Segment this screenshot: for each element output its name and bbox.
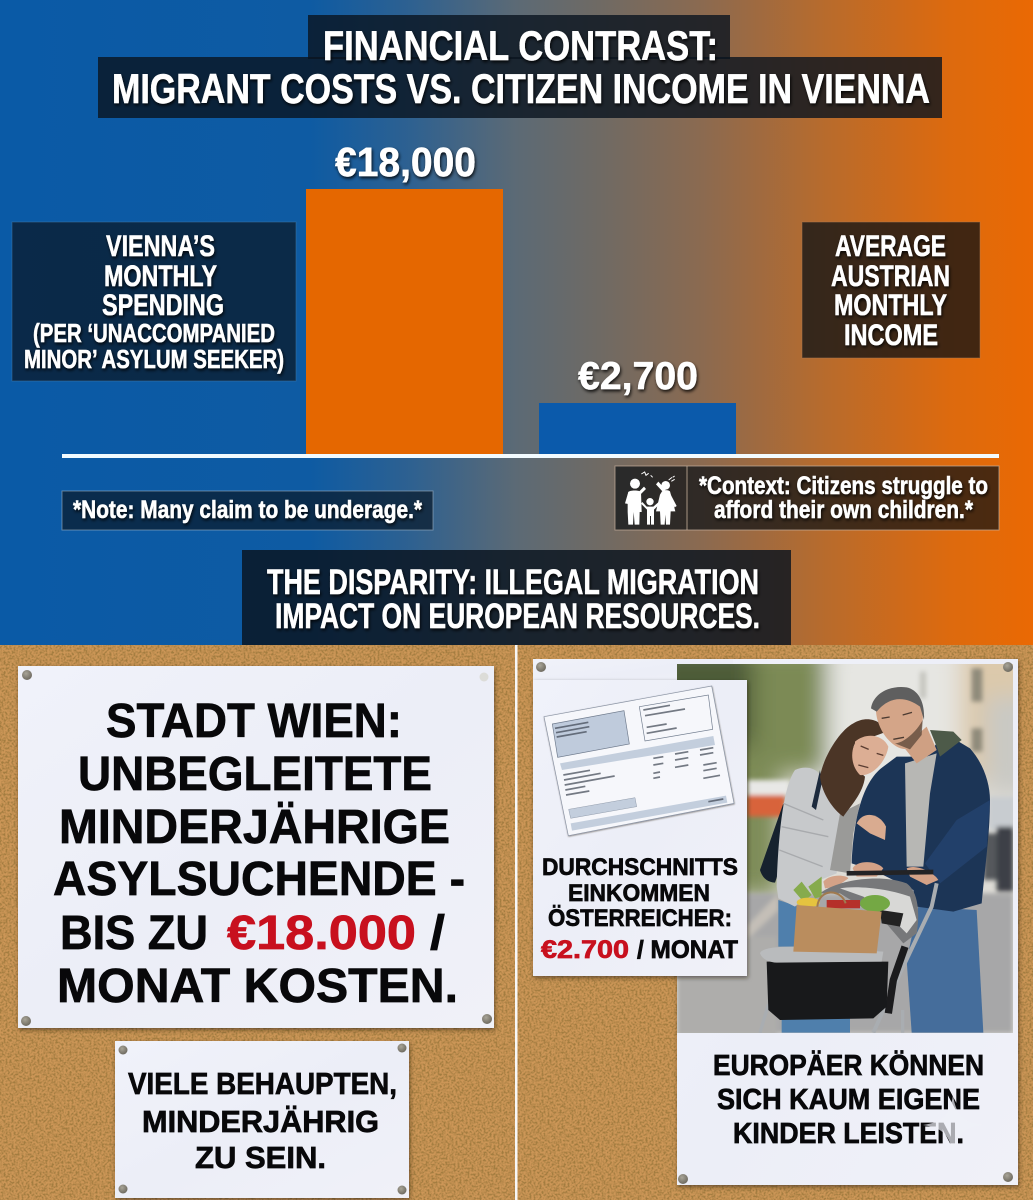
poster: Stadt Wien costs: BIS ZU xyxy=(60,907,208,960)
poster: income slip: €2.700 xyxy=(541,936,629,964)
panel: financial contrast chart xyxy=(0,0,1033,646)
label: Vienna's monthly spending: (PER ‘UNACCOMPANIED xyxy=(33,318,275,348)
poster: Stadt Wien costs: MINDERJÄHRIGE xyxy=(59,801,450,854)
label: Vienna's monthly spending xyxy=(12,222,296,381)
photo: tired couple with stroller xyxy=(677,664,1013,1033)
poster: Stadt Wien costs: €18.000 xyxy=(227,907,416,960)
poster: family photo with caption: EUROPÄER KÖNNEN xyxy=(713,1049,984,1082)
label: average Austrian monthly income: INCOME xyxy=(844,319,938,352)
icon: sparkle mark xyxy=(923,1095,983,1155)
poster: Stadt Wien costs xyxy=(18,666,494,1028)
label: Vienna's monthly spending: MINOR’ ASYLUM SEEKER) xyxy=(24,344,284,374)
poster: income slip xyxy=(533,662,747,976)
value: 2,700: €2,700 xyxy=(578,355,698,398)
banner: the disparity xyxy=(242,550,791,645)
poster: many claim to be minors xyxy=(115,1041,409,1198)
baseline axis xyxy=(62,454,999,458)
title: FINANCIAL CONTRAST: xyxy=(323,22,718,69)
poster: family photo with caption: SICH KAUM EIGENE xyxy=(717,1084,980,1116)
note: many claim to be underage xyxy=(62,491,433,530)
stroller xyxy=(760,872,937,1033)
label: average Austrian monthly income: MONTHLY xyxy=(834,289,947,322)
context note xyxy=(615,466,999,530)
banner: the disparity: IMPACT ON EUROPEAN RESOURCES. xyxy=(275,597,760,636)
poster: income slip: / MONAT xyxy=(637,936,738,964)
poster: family photo with caption: KINDER LEISTEN. xyxy=(733,1118,964,1150)
panel: corkboard xyxy=(0,645,1033,1200)
poster: many claim to be minors: MINDERJÄHRIG xyxy=(142,1104,379,1139)
poster: Stadt Wien costs: ASYLSUCHENDE - xyxy=(53,853,465,906)
poster: many claim to be minors: ZU SEIN. xyxy=(195,1140,326,1175)
man xyxy=(823,687,990,1033)
poster: family photo with caption xyxy=(533,647,1033,1185)
poster: Stadt Wien costs: STADT WIEN: xyxy=(106,695,402,748)
label: Vienna's monthly spending: SPENDING xyxy=(102,289,224,322)
banner: the disparity: THE DISPARITY: ILLEGAL MIGRATION xyxy=(267,563,759,602)
poster: many claim to be minors: VIELE BEHAUPTEN, xyxy=(128,1066,397,1101)
context note: afford their own children.* xyxy=(714,496,973,524)
label: average Austrian monthly income: AUSTRIAN xyxy=(831,260,950,293)
poster: Stadt Wien costs: UNBEGLEITETE xyxy=(78,748,432,801)
poster: Stadt Wien costs: MONAT KOSTEN. xyxy=(57,960,458,1013)
poster: income slip: ÖSTERREICHER: xyxy=(548,905,732,932)
woman xyxy=(760,719,888,1033)
note: many claim to be underage: *Note: Many claim to be underage.* xyxy=(73,496,422,524)
title xyxy=(98,15,942,118)
label: average Austrian monthly income xyxy=(802,222,980,358)
icon: struggling family xyxy=(625,472,677,525)
icon: pay statement document xyxy=(544,686,734,836)
bar: Austrian income xyxy=(539,403,736,455)
value: 18,000: €18,000 xyxy=(335,139,476,185)
label: Vienna's monthly spending: MONTHLY xyxy=(104,260,217,293)
label: average Austrian monthly income: AVERAGE xyxy=(835,230,946,263)
poster: Stadt Wien costs: / xyxy=(430,907,445,960)
label: Vienna's monthly spending: VIENNA’S xyxy=(106,230,215,263)
poster: income slip: EINKOMMEN xyxy=(568,880,710,907)
bar: Vienna spending xyxy=(306,189,503,455)
poster: income slip: DURCHSCHNITTS xyxy=(542,854,738,881)
